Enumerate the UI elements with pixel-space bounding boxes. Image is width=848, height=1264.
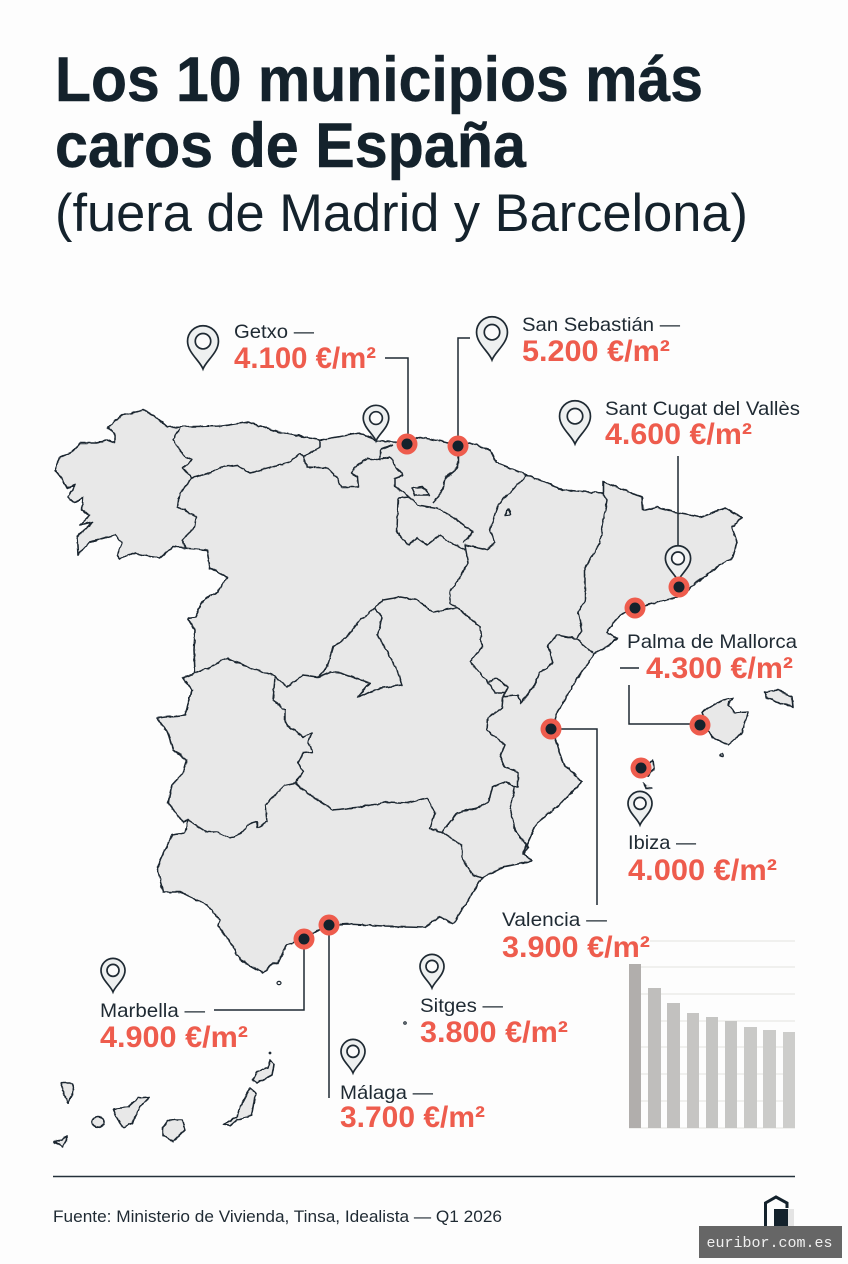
region borders <box>173 428 607 878</box>
La Palma <box>62 1083 74 1103</box>
label: Palma de Mallorca: 4.300 €/m² <box>646 652 793 685</box>
label: Getxo: Getxo — <box>234 321 315 343</box>
Lanzarote <box>253 1060 274 1083</box>
label: Getxo: 4.100 €/m² <box>234 342 376 375</box>
label: Sant Cugat del Vallès <box>605 398 800 451</box>
watermark <box>699 1226 842 1258</box>
pin: Sant Cugat map <box>665 546 691 581</box>
pin: Ibiza <box>628 791 652 825</box>
Menorca <box>765 690 793 707</box>
label: Málaga: Málaga — <box>340 1082 434 1104</box>
label: San Sebastián: San Sebastián — <box>522 314 681 336</box>
title: (fuera de Madrid y Barcelona) <box>55 184 748 243</box>
label: Marbella: 4.900 €/m² <box>100 1021 248 1054</box>
label: Palma de Mallorca: Palma de Mallorca <box>627 631 797 653</box>
title <box>55 45 748 243</box>
pin: Getxo map <box>363 405 389 441</box>
label: San Sebastián <box>522 314 681 368</box>
label: Sant Cugat del Vallès: Sant Cugat del Vallès <box>605 398 800 420</box>
label: Ibiza: 4.000 €/m² <box>628 854 777 887</box>
label: Getxo <box>234 321 376 375</box>
bar chart <box>629 941 795 1128</box>
source text: Fuente: Ministerio de Vivienda, Tinsa, Idealista — Q1 2026 <box>53 1208 502 1226</box>
label: Sitges: Sitges — <box>420 995 504 1017</box>
pin: Málaga <box>341 1039 365 1073</box>
Mallorca <box>702 698 748 745</box>
El Hierro <box>54 1136 67 1147</box>
label: Sitges <box>420 995 568 1049</box>
label: Valencia: 3.900 €/m² <box>502 931 650 964</box>
label: Palma de Mallorca <box>627 631 797 685</box>
pin: Sant Cugat label <box>560 401 590 444</box>
label: Sant Cugat del Vallès: 4.600 €/m² <box>605 418 752 451</box>
Tenerife <box>113 1097 149 1128</box>
label: Sitges: 3.800 €/m² <box>420 1016 568 1049</box>
title: Los 10 municipios más <box>55 45 703 115</box>
label: Ibiza <box>628 832 777 887</box>
La Gomera <box>92 1117 104 1127</box>
pin: Marbella <box>101 958 125 992</box>
Cabrera <box>720 754 723 756</box>
label: Marbella <box>100 1000 248 1054</box>
label: Valencia: Valencia — <box>502 909 608 931</box>
label: San Sebastián: 5.200 €/m² <box>522 335 670 368</box>
label: Ibiza: Ibiza — <box>628 832 697 854</box>
watermark: euribor.com.es <box>706 1235 832 1252</box>
small island dots <box>269 981 406 1054</box>
mainland <box>55 410 742 973</box>
leader lines <box>214 338 700 1098</box>
label: Málaga: 3.700 €/m² <box>340 1101 485 1134</box>
map of Spain <box>54 410 793 1147</box>
pin: Getxo label <box>188 326 218 369</box>
icon: house logo <box>766 1197 794 1229</box>
label: Valencia <box>502 909 650 964</box>
Gran Canaria <box>163 1120 185 1142</box>
label: Marbella: Marbella — <box>100 1000 206 1022</box>
pin: San Sebastián <box>477 317 507 360</box>
Ibiza <box>646 760 654 776</box>
footer divider <box>53 1176 795 1178</box>
label: Málaga <box>340 1082 485 1134</box>
Formentera <box>643 782 652 788</box>
title: caros de España <box>55 111 527 181</box>
location markers <box>294 434 710 950</box>
pin: Sitges <box>420 954 444 988</box>
Fuerteventura <box>223 1088 256 1126</box>
